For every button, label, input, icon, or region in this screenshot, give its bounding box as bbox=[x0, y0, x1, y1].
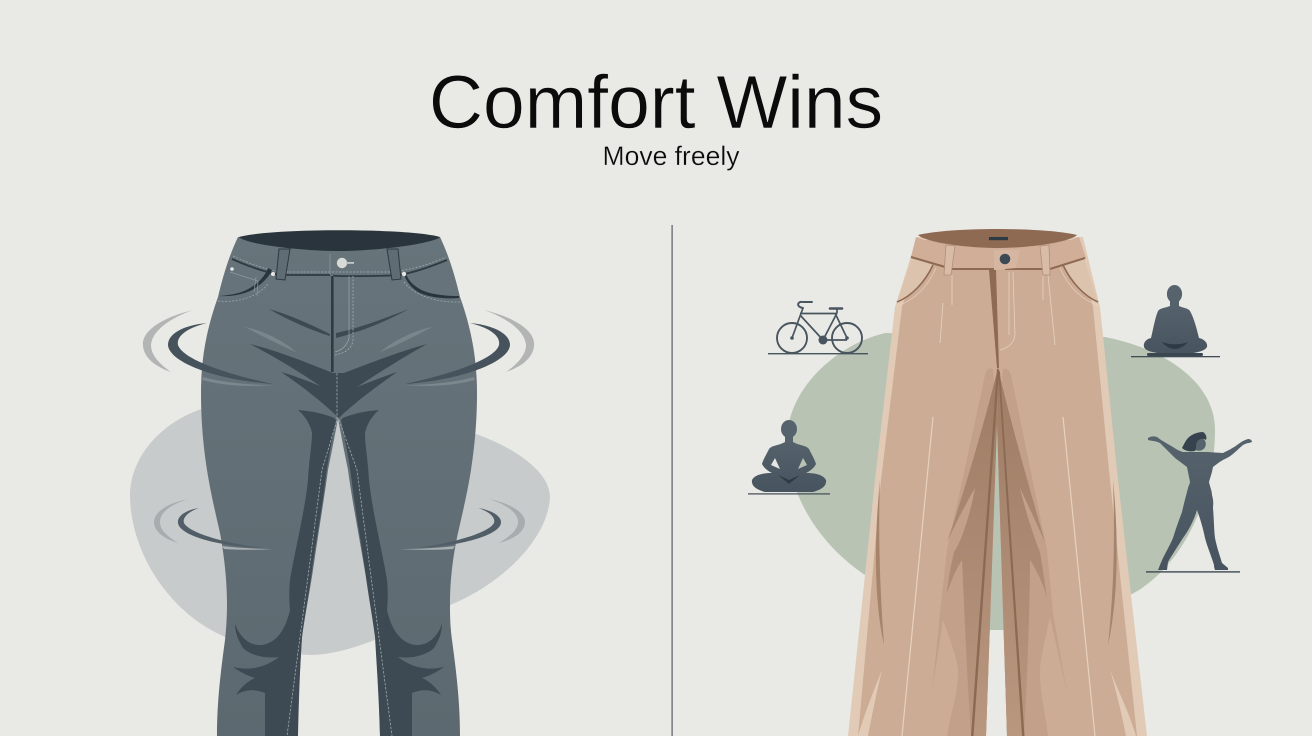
center divider bbox=[672, 225, 673, 736]
upper hip wrinkles bbox=[269, 309, 330, 336]
inner motion swooshes upper bbox=[168, 323, 510, 386]
button bbox=[337, 258, 347, 268]
crotch stress wrinkles bbox=[250, 344, 427, 418]
waistband bbox=[232, 230, 447, 280]
dark wedges bbox=[947, 368, 998, 736]
button bbox=[1000, 254, 1010, 264]
jeans inner shadow bands bbox=[233, 309, 444, 736]
trousers pockets bbox=[897, 265, 1100, 306]
belt loops bbox=[944, 245, 955, 275]
trousers main panels bbox=[858, 240, 1137, 736]
fly bbox=[330, 254, 353, 372]
inner label bbox=[989, 237, 1008, 240]
title: Comfort Wins bbox=[429, 60, 883, 144]
jeans body bbox=[201, 237, 477, 736]
panel: relaxed trousers bbox=[787, 229, 1215, 736]
green background blob bbox=[787, 333, 1215, 630]
grey background blob bbox=[130, 408, 550, 655]
waist opening bbox=[918, 229, 1077, 248]
band bbox=[911, 237, 1086, 270]
pocket corner panels bbox=[897, 258, 1098, 302]
icon: bicycle bbox=[768, 302, 868, 354]
band seam bbox=[911, 257, 1085, 269]
highlight crease lines bbox=[902, 275, 1095, 736]
icon: seated person left bbox=[748, 420, 830, 494]
fly tab bbox=[994, 250, 1020, 270]
dancer hair bbox=[1182, 432, 1206, 451]
waist opening bbox=[239, 230, 440, 251]
waistband lower seam bbox=[232, 259, 447, 276]
icon: dancing figure bbox=[1146, 432, 1252, 573]
panel: tight jeans bbox=[130, 230, 550, 736]
dark crease lines bbox=[971, 368, 999, 736]
pockets bbox=[218, 267, 461, 302]
trousers waistband bbox=[911, 229, 1086, 275]
inseam stitching bbox=[287, 373, 392, 736]
belt loops bbox=[276, 249, 290, 280]
subtitle: Move freely bbox=[603, 141, 740, 171]
trousers fly bbox=[989, 270, 1015, 368]
crotch shading bbox=[932, 368, 1067, 736]
motion swooshes lower bbox=[154, 499, 525, 550]
outer motion swooshes upper bbox=[143, 310, 534, 372]
trousers body bbox=[848, 237, 1147, 736]
side folds bbox=[858, 480, 1136, 736]
dancer head bbox=[1192, 437, 1206, 451]
light hip wrinkles bbox=[245, 327, 432, 352]
icon: meditating person right bbox=[1131, 285, 1220, 357]
